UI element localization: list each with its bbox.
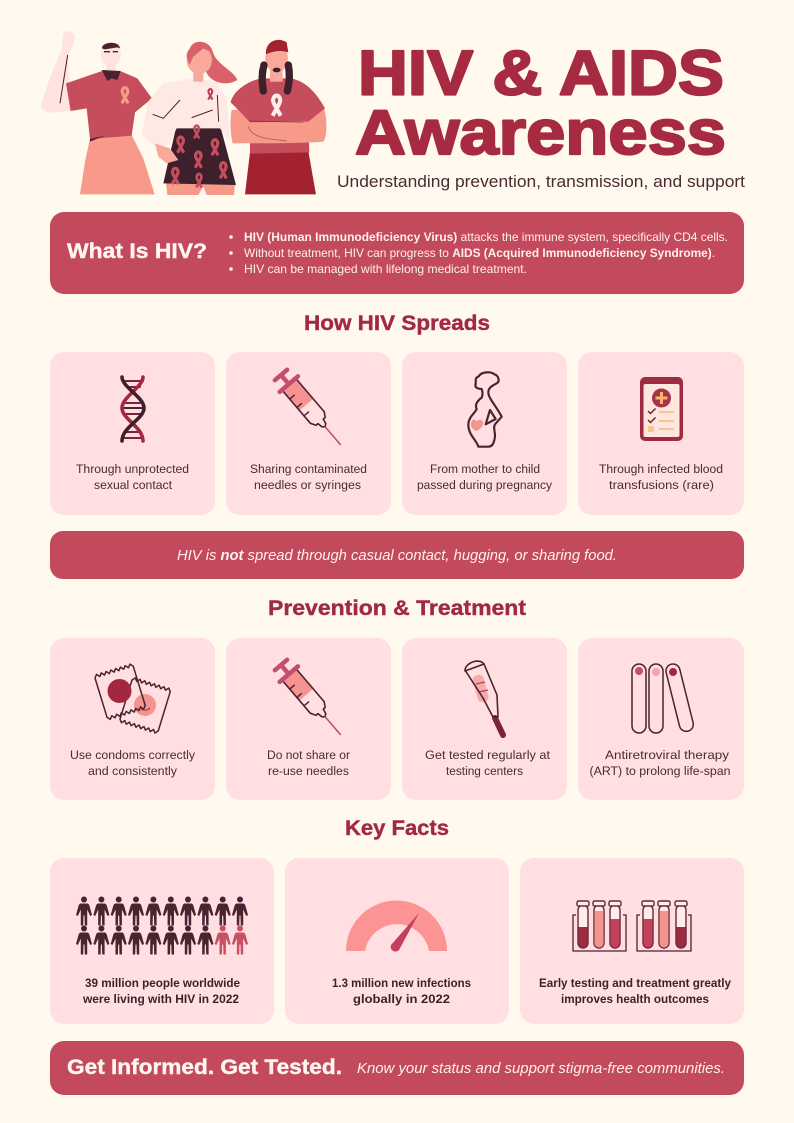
panel: do not share needles: Do not share or	[267, 748, 350, 762]
panel: 39 million	[50, 858, 274, 1024]
person: man with raised arm	[41, 31, 155, 194]
callout: not spread through casual contact	[50, 531, 744, 579]
call to action banner	[50, 1041, 744, 1095]
pictogram: people	[76, 896, 248, 954]
panel: sexual contact: sexual contact	[94, 478, 173, 492]
panel: do not share needles	[226, 638, 391, 800]
heading: key facts: Key Facts	[345, 817, 449, 840]
panel: get tested: testing centers	[446, 764, 523, 778]
person: woman with ribbon skirt	[142, 42, 237, 195]
panel: antiretroviral therapy: Antiretroviral therapy	[605, 748, 730, 762]
person: man with crossed arms and cap	[230, 40, 326, 194]
call to action banner: Know your status and support stigma-free communities.	[357, 1061, 725, 1077]
heading: what is HIV: What Is HIV?	[67, 240, 207, 263]
panel: early testing	[520, 858, 744, 1024]
panel: get tested: Get tested regularly at	[425, 748, 551, 762]
icon: test tube racks	[573, 901, 691, 951]
panel: antiretroviral therapy: (ART) to prolong life-span	[590, 764, 731, 778]
panel: get tested	[402, 638, 567, 800]
panel: condoms: and consistently	[88, 764, 178, 778]
icon: pregnant woman	[468, 372, 502, 447]
bullet list: Without treatment, HIV can progress to AIDS (Acquired Immunodeficiency Syndrome).	[244, 246, 715, 260]
panel: 1.3 million	[285, 858, 509, 1024]
heading: how HIV spreads: How HIV Spreads	[304, 312, 490, 335]
heading: prevention and treatment: Prevention & Treatment	[268, 597, 526, 620]
panel: early testing: improves health outcomes	[561, 992, 709, 1006]
panel: mother to child: From mother to child	[430, 462, 540, 476]
panel: sexual contact	[50, 352, 215, 515]
icon: medical clipboard	[640, 377, 683, 441]
panel: condoms	[50, 638, 215, 800]
bullet list: HIV (Human Immunodeficiency Virus) attacks the immune system, specifically CD4 cells.	[244, 230, 728, 244]
panel: needles	[226, 352, 391, 515]
panel: condoms: Use condoms correctly	[70, 748, 196, 762]
panel: 39 million: 39 million people worldwide	[85, 976, 240, 990]
illustration: three people wearing awareness ribbons	[41, 31, 326, 195]
panel: antiretroviral therapy	[578, 638, 744, 800]
panel: early testing: Early testing and treatment greatly	[539, 976, 731, 990]
icon: syringe	[272, 657, 350, 743]
panel: do not share needles: re-use needles	[268, 764, 349, 778]
call to action banner: Get Informed. Get Tested.	[67, 1056, 342, 1079]
callout: not spread through casual contact: HIV is not spread through casual contact, hugging, or sharing food.	[177, 547, 617, 564]
panel: what is HIV	[50, 212, 744, 294]
panel: mother to child	[402, 352, 567, 515]
icon: gauge	[346, 900, 447, 952]
panel: blood transfusions: transfusions (rare)	[609, 478, 714, 492]
icon: DNA helix	[122, 377, 144, 441]
title	[355, 38, 726, 168]
panel: needles: needles or syringes	[254, 478, 361, 492]
panel: 1.3 million: 1.3 million new infections	[332, 976, 471, 990]
icon: syringe	[272, 367, 350, 453]
panel: 39 million: were living with HIV in 2022	[82, 992, 239, 1006]
panel: sexual contact: Through unprotected	[76, 462, 189, 476]
title: Awareness	[355, 98, 726, 168]
title: HIV & AIDS	[358, 38, 724, 108]
subtitle: Understanding prevention, transmission, and support	[337, 172, 745, 191]
icon: medication tubes	[632, 663, 695, 733]
panel: needles: Sharing contaminated	[250, 462, 367, 476]
panel: mother to child: passed during pregnancy	[417, 478, 553, 492]
icon: condom packets	[94, 663, 171, 734]
panel: blood transfusions	[578, 352, 744, 515]
bullet list	[229, 230, 728, 276]
panel: 1.3 million: globally in 2022	[353, 992, 450, 1006]
bullet list: HIV can be managed with lifelong medical treatment.	[244, 262, 527, 276]
panel: blood transfusions: Through infected blood	[599, 462, 723, 476]
icon: test device	[465, 661, 503, 735]
